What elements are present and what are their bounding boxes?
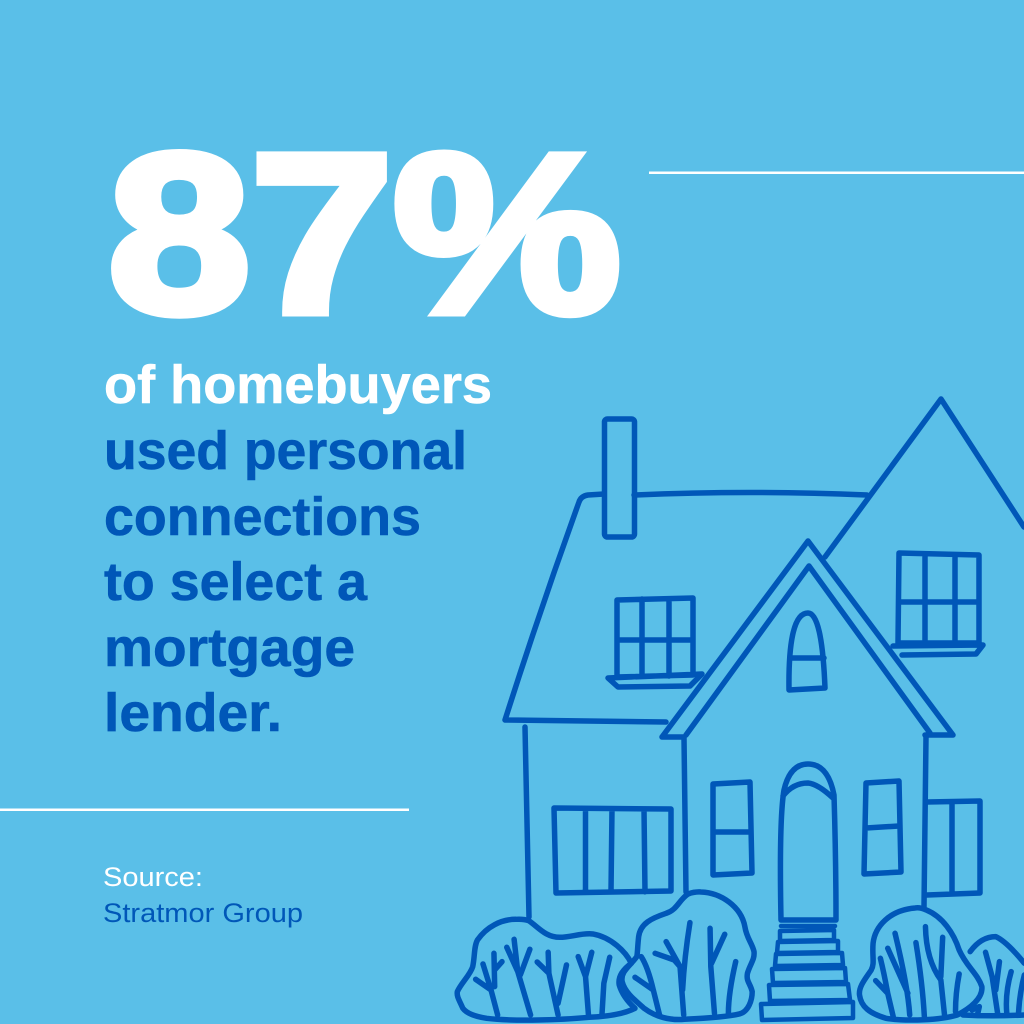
upper left window [608,598,702,687]
upper right window [893,553,983,655]
statement text: mortgage [104,618,355,678]
bush centre [622,892,754,1020]
big statistic: 87% [108,108,621,361]
statement text: used personal [104,421,467,481]
lower left window [554,808,671,893]
steps [761,926,853,1020]
tall gable [825,399,1024,557]
bush far right [963,937,1024,1016]
bush left [457,919,635,1020]
statement text: connections [104,487,421,547]
source note: Stratmor Group [103,898,303,928]
source note: Source: [103,862,203,892]
door [780,764,836,920]
icon: house line drawing [457,399,1024,1020]
attic window [789,613,825,690]
statement text [104,355,492,743]
main roof [505,492,867,722]
far right window [927,801,980,895]
statement text: to select a [104,552,368,612]
bush right [859,908,982,1020]
chimney [604,419,634,537]
source note [103,862,303,928]
front gable [662,541,953,737]
walls [525,727,926,917]
statement text: lender. [104,683,282,743]
left side window [713,782,752,875]
statement text: of homebuyers [104,355,492,415]
right side window [864,781,901,874]
